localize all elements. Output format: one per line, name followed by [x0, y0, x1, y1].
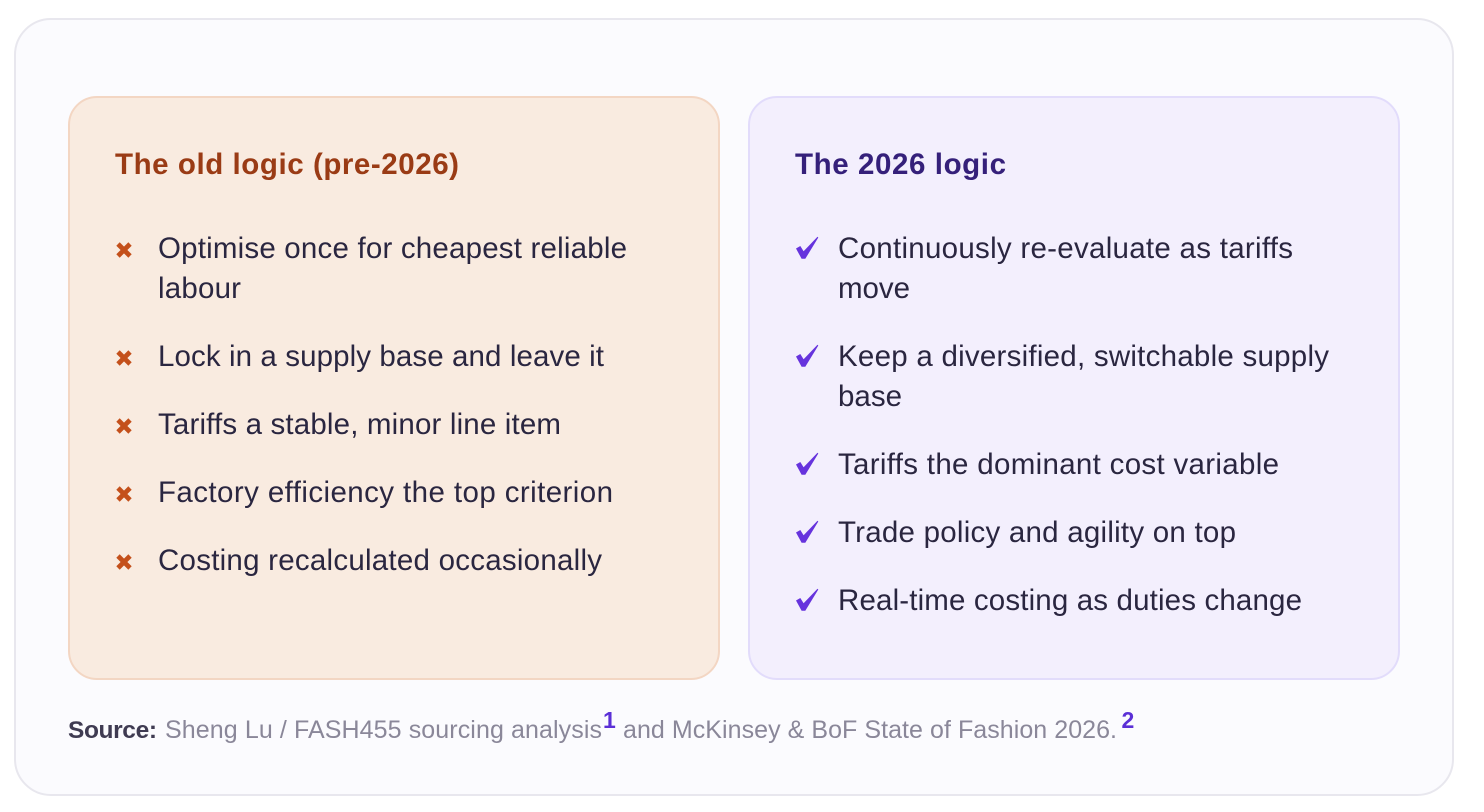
item: continuously re-evaluate: move: [838, 272, 910, 305]
item: optimise once: [118, 232, 627, 305]
item: trade policy: Trade policy and agility on top: [838, 516, 1236, 549]
panel: old logic: [69, 97, 719, 679]
source note: 1: [603, 707, 616, 733]
item: optimise once: labour: [158, 272, 241, 305]
item: diversified supply base: Keep a diversified, switchable supply: [838, 340, 1329, 373]
source note: [68, 707, 1134, 744]
panel: 2026 logic: [749, 97, 1399, 679]
source note: Sheng Lu / FASH455 sourcing analysis: [165, 716, 602, 744]
heading: old logic: The old logic (pre-2026): [115, 148, 459, 181]
item: real-time costing: Real-time costing as duties change: [838, 584, 1302, 617]
source note: and McKinsey & BoF State of Fashion 2026.: [623, 716, 1117, 744]
item: lock in: Lock in a supply base and leave it: [158, 340, 604, 373]
item: tariffs dominant: Tariffs the dominant cost variable: [838, 448, 1279, 481]
item: continuously re-evaluate: Continuously re-evaluate as tariffs: [838, 232, 1293, 265]
item: continuously re-evaluate: [796, 232, 1293, 305]
heading: 2026 logic: The 2026 logic: [795, 148, 1006, 181]
item: costing occasional: Costing recalculated occasionally: [158, 544, 602, 577]
source note: Source:: [68, 717, 157, 744]
item: optimise once: Optimise once for cheapest reliable: [158, 232, 627, 265]
item: diversified supply base: base: [838, 380, 902, 413]
source note: 2: [1122, 707, 1134, 733]
item: tariffs minor: Tariffs a stable, minor line item: [158, 408, 561, 441]
item: factory efficiency: Factory efficiency the top criterion: [158, 476, 613, 509]
item: diversified supply base: [796, 340, 1329, 413]
